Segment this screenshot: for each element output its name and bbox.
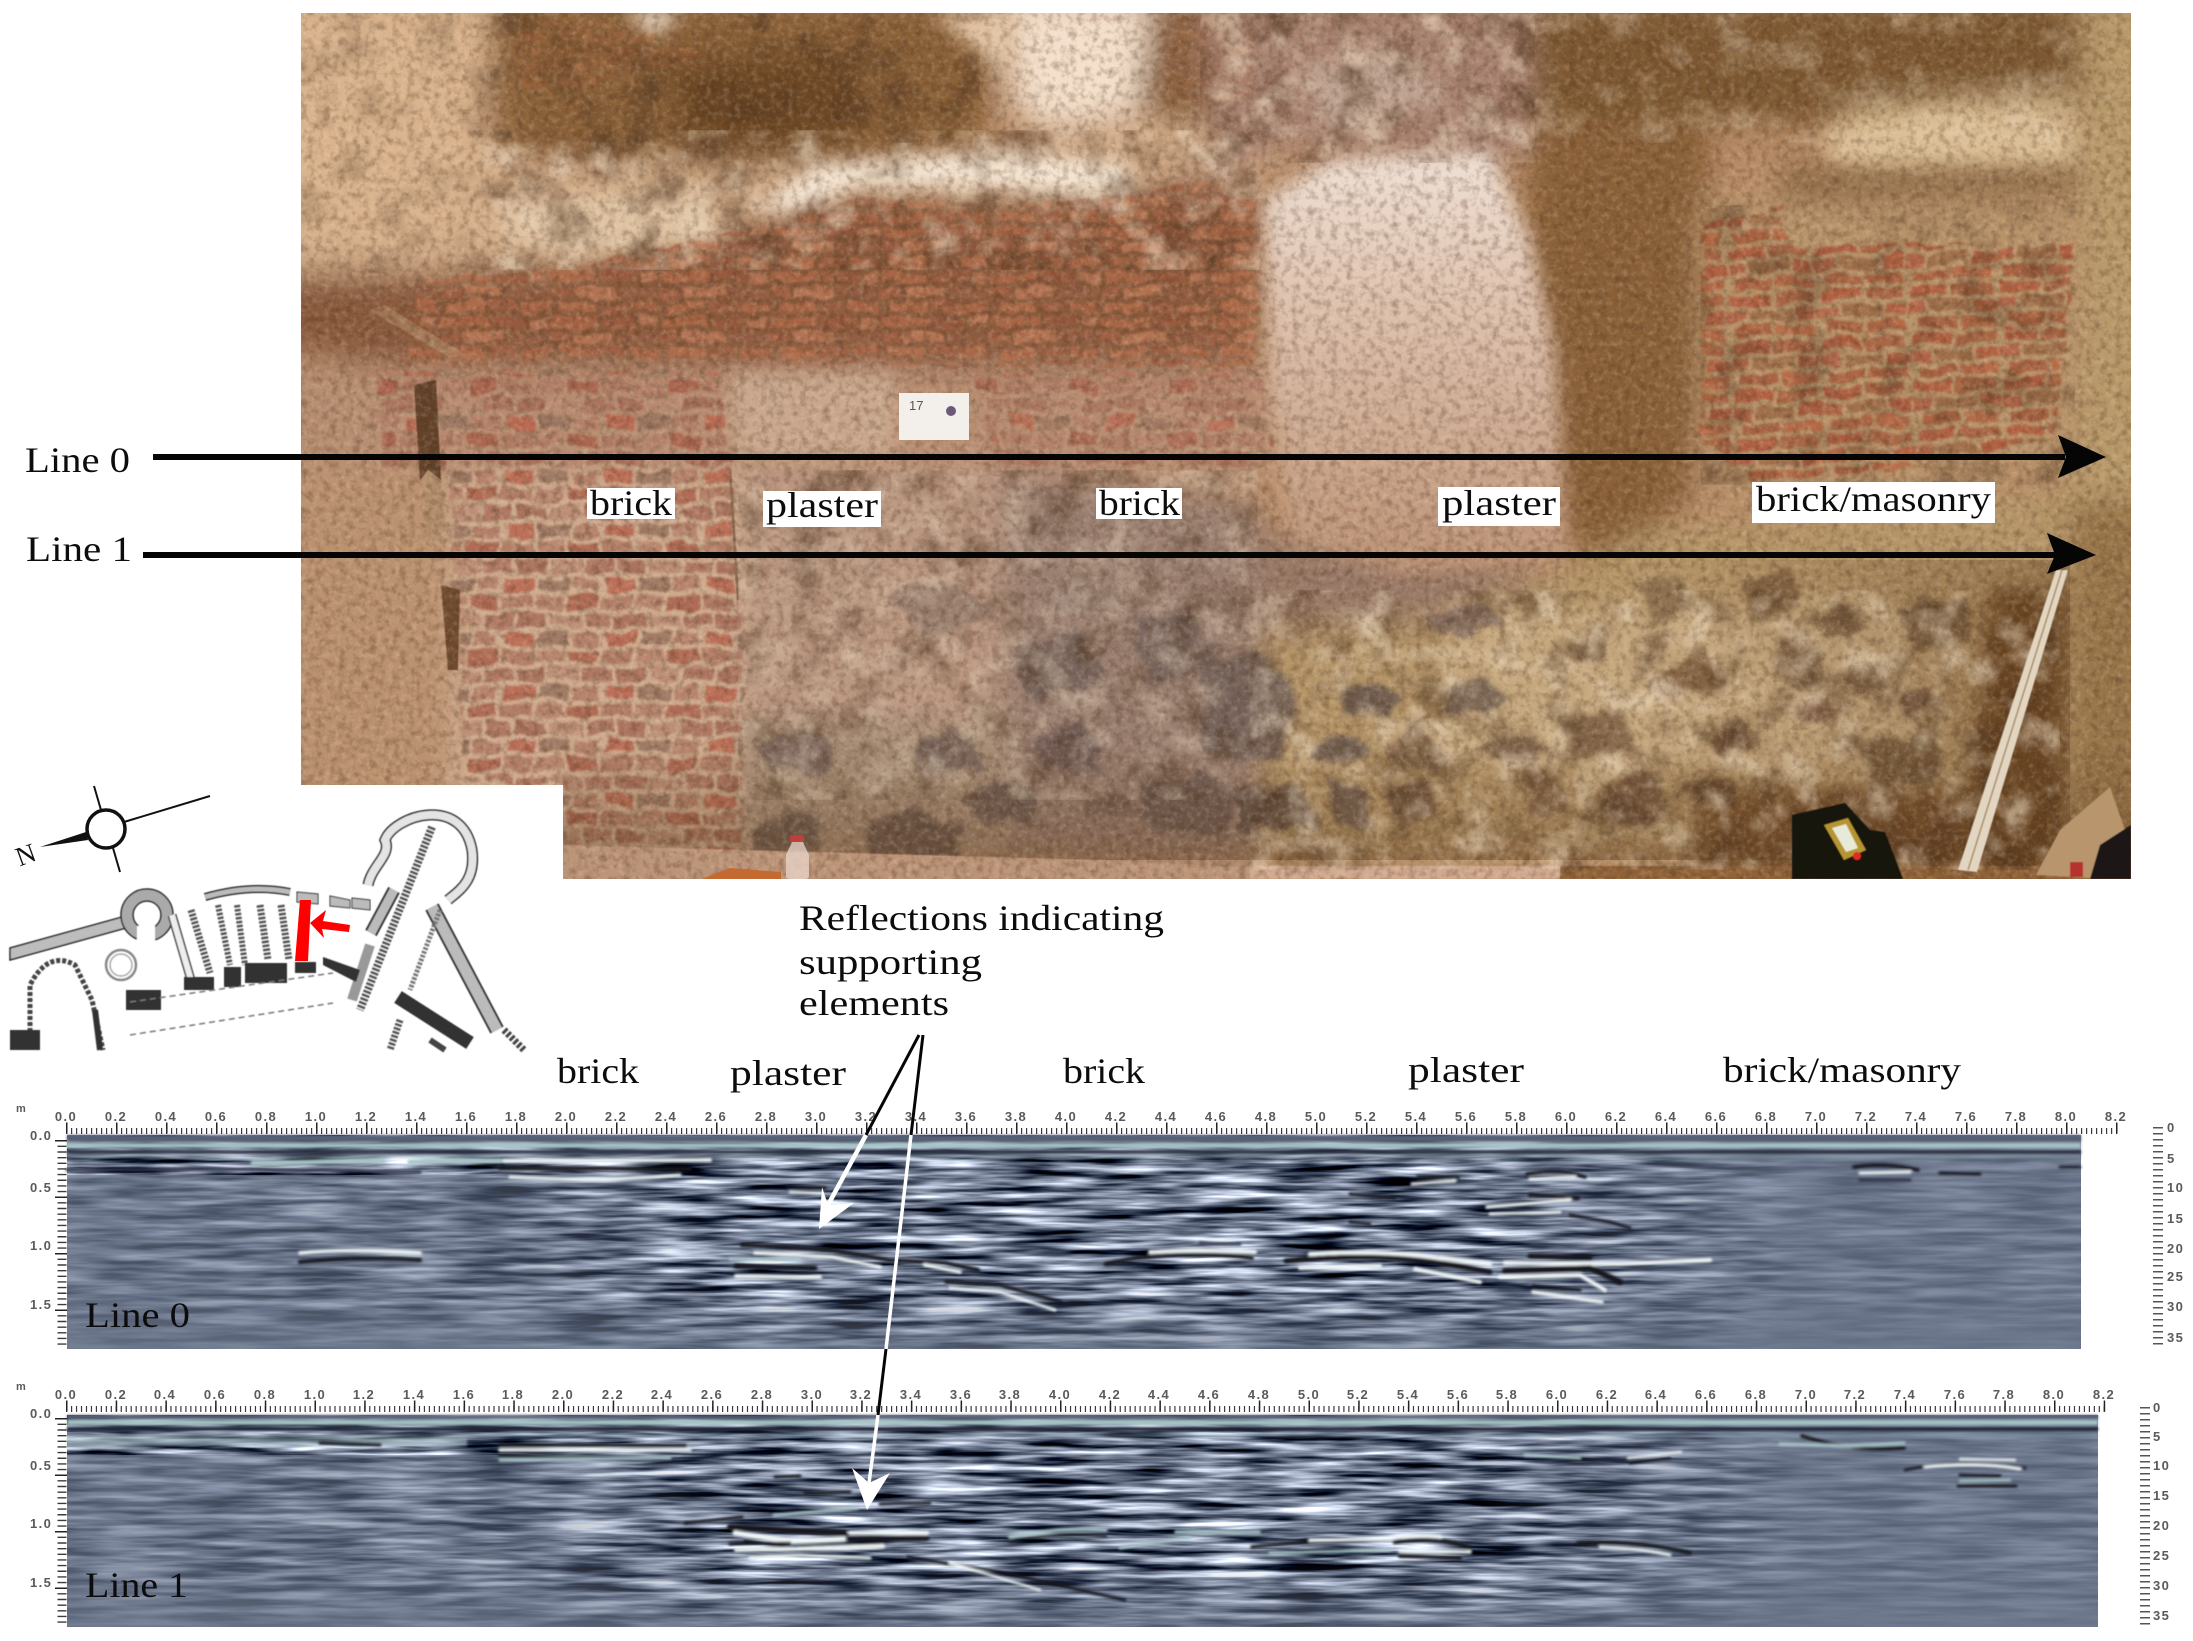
axis: Line 1 distance ruler: 1.4 <box>403 1387 425 1402</box>
axis: Line 0 distance ruler: 1.0 <box>305 1109 327 1124</box>
brick courses, upper band <box>400 20 1257 368</box>
axis: Line 0 right scale: 20 <box>2167 1241 2184 1256</box>
axis: Line 1 distance ruler: 7.2 <box>1844 1387 1866 1402</box>
axis: Line 0 distance ruler: 7.2 <box>1855 1109 1877 1124</box>
axis: Line 0 distance ruler: 0.4 <box>155 1109 177 1124</box>
callout: reflections indicating supporting elements: supporting <box>799 942 982 982</box>
axis: Line 1 distance ruler: 0.0 <box>55 1387 77 1402</box>
axis: Line 0 distance ruler: 4.0 <box>1055 1109 1077 1124</box>
axis: Line 1 distance ruler: 1.0 <box>304 1387 326 1402</box>
axis: Line 1 distance ruler: 4.4 <box>1148 1387 1170 1402</box>
axis: Line 1 right scale: 15 <box>2153 1488 2170 1503</box>
axis: Line 1 distance ruler: 6.8 <box>1745 1387 1767 1402</box>
callout: reflections indicating supporting elements: Reflections indicating <box>799 898 1164 938</box>
axis: Line 1 right scale: 35 <box>2153 1608 2170 1623</box>
photo label: plaster 2: plaster <box>1442 483 1556 523</box>
axis: Line 0 distance ruler: 0.6 <box>205 1109 227 1124</box>
axis: Line 0 right scale: 25 <box>2167 1269 2184 1284</box>
rubble texture patches <box>301 13 2075 870</box>
axis: Line 1 distance ruler: 0.4 <box>154 1387 176 1402</box>
axis: Line 0 distance ruler: 8.0 <box>2055 1109 2077 1124</box>
chart: radargram Line 1 <box>67 1415 2098 1627</box>
axis: Line 1 distance ruler: 5.4 <box>1397 1387 1419 1402</box>
axis: Line 0 depth scale in metres <box>16 1103 62 1345</box>
axis: Line 0 right scale: 30 <box>2167 1299 2184 1314</box>
radar device <box>1792 803 1903 879</box>
arrow: Line 0 <box>153 435 2106 478</box>
axis: Line 0 distance ruler: 7.8 <box>2005 1109 2027 1124</box>
brick courses, red right panel <box>1700 205 2074 480</box>
axis: Line 0 distance ruler: 6.6 <box>1705 1109 1727 1124</box>
axis: Line 0 distance ruler: 7.4 <box>1905 1109 1927 1124</box>
axis: Line 0 right scale: 10 <box>2167 1180 2184 1195</box>
label: Line 1 inside chart: Line 1 <box>85 1565 188 1605</box>
axis: Line 0 distance ruler: 2.6 <box>705 1109 727 1124</box>
sack and red item at right <box>2036 787 2131 879</box>
photo label: brick: brick <box>590 483 672 523</box>
axis: Line 1 right scale: 10 <box>2153 1458 2170 1473</box>
axis: Line 0 distance ruler: 1.6 <box>455 1109 477 1124</box>
label: Line 0: Line 0 <box>25 440 130 480</box>
axis: Line 1 distance ruler: 0.2 <box>105 1387 127 1402</box>
radargram header: brick: brick <box>557 1051 639 1091</box>
axis: Line 0 distance ruler: 5.0 <box>1305 1109 1327 1124</box>
axis: Line 1 right scale: 25 <box>2153 1548 2170 1563</box>
axis: Line 0 distance ruler: 5.4 <box>1405 1109 1427 1124</box>
axis: Line 1 right scale: 5 <box>2153 1429 2162 1444</box>
site plan with compass <box>10 786 524 1050</box>
axis: Line 1 distance ruler: 7.6 <box>1944 1387 1966 1402</box>
axis: Line 0 depth scale in metres: 0.0 <box>30 1128 52 1143</box>
axis: Line 1 distance ruler: 5.6 <box>1447 1387 1469 1402</box>
axis: Line 1 distance ruler: 1.8 <box>502 1387 524 1402</box>
axis: Line 1 distance ruler: 0.8 <box>254 1387 276 1402</box>
axis: Line 0 distance ruler: 0.2 <box>105 1109 127 1124</box>
axis: Line 0 distance ruler: 6.0 <box>1555 1109 1577 1124</box>
axis: Line 1 distance ruler: 5.0 <box>1298 1387 1320 1402</box>
axis: Line 1 distance ruler: 6.4 <box>1645 1387 1667 1402</box>
icon: compass: N <box>11 837 40 872</box>
axis: Line 0 distance ruler: 3.4 <box>905 1109 927 1124</box>
axis: Line 1 distance ruler: 3.8 <box>999 1387 1021 1402</box>
photo label: plaster: plaster <box>766 485 878 525</box>
photo label: brick/masonry: brick/masonry <box>1756 479 1991 519</box>
orange object on the floor <box>702 868 781 879</box>
axis: Line 0 distance ruler: 6.8 <box>1755 1109 1777 1124</box>
axis: Line 0 depth scale in metres: 0.5 <box>30 1180 52 1195</box>
axis: Line 1 distance ruler: 2.8 <box>751 1387 773 1402</box>
axis: Line 1 distance ruler: 4.6 <box>1198 1387 1220 1402</box>
axis: Line 0 distance ruler: 3.2 <box>855 1109 877 1124</box>
axis: Line 0 distance ruler: 2.8 <box>755 1109 777 1124</box>
axis: Line 0 depth scale in metres: 1.0 <box>30 1238 52 1253</box>
axis: Line 0 distance ruler: 5.2 <box>1355 1109 1377 1124</box>
bottle <box>786 835 809 879</box>
axis: Line 1 distance ruler: 3.2 <box>850 1387 872 1402</box>
shadow gradients <box>563 560 2131 880</box>
panel: wall photograph <box>270 0 2150 890</box>
axis: Line 1 distance ruler: 6.2 <box>1596 1387 1618 1402</box>
axis: Line 0 distance ruler: 2.4 <box>655 1109 677 1124</box>
axis: Line 0 distance ruler: 1.4 <box>405 1109 427 1124</box>
red arrow <box>310 910 350 938</box>
axis: Line 0 distance ruler: 2.0 <box>555 1109 577 1124</box>
strong reflectors <box>320 1436 2025 1600</box>
axis: Line 1 distance ruler: 1.6 <box>453 1387 475 1402</box>
axis: Line 1 distance ruler: 4.8 <box>1248 1387 1270 1402</box>
axis: Line 0 distance ruler: 8.2 <box>2105 1109 2127 1124</box>
axis: Line 0 distance ruler: 7.6 <box>1955 1109 1977 1124</box>
axis: Line 0 distance ruler: 3.0 <box>805 1109 827 1124</box>
axis: Line 0 distance ruler: 6.2 <box>1605 1109 1627 1124</box>
axis: Line 1 distance ruler: 2.6 <box>701 1387 723 1402</box>
floor plan of the building <box>10 815 524 1050</box>
axis: Line 0 distance ruler: 4.6 <box>1205 1109 1227 1124</box>
radargram header: plaster 2: plaster <box>1408 1050 1524 1090</box>
axis: Line 0 right scale: 35 <box>2167 1330 2184 1345</box>
axis: Line 1 depth scale in metres: 1.0 <box>30 1516 52 1531</box>
survey card "17" <box>899 393 969 440</box>
arrow: callout to Line 0 reflection <box>819 1035 919 1229</box>
photo label: brick 2: brick <box>1099 483 1180 523</box>
axis: Line 1 depth scale in metres: 0.5 <box>30 1458 52 1473</box>
arrow: Line 1 <box>143 533 2096 574</box>
radargram header: brick/masonry: brick/masonry <box>1723 1050 1961 1090</box>
leaning stick <box>1958 570 2068 872</box>
surface bands <box>67 1415 2098 1446</box>
axis: Line 0 distance ruler: 1.8 <box>505 1109 527 1124</box>
strong reflectors <box>67 1160 2080 1310</box>
axis: Line 1 distance ruler: 3.4 <box>900 1387 922 1402</box>
axis: Line 1 right scale: 0 <box>2153 1400 2162 1415</box>
red survey line marker <box>295 900 311 961</box>
axis: Line 1 distance ruler: 3.0 <box>801 1387 823 1402</box>
axis: Line 1 distance ruler: 1.2 <box>353 1387 375 1402</box>
axis: Line 0 distance ruler: 4.2 <box>1105 1109 1127 1124</box>
brick courses, lower panel <box>380 372 1275 880</box>
callout: reflections indicating supporting elements: elements <box>799 983 949 1023</box>
axis: Line 0 depth scale in metres: m <box>16 1103 27 1115</box>
axis: Line 1 right scale <box>2145 1400 2170 1625</box>
axis: Line 0 distance ruler: 0.8 <box>255 1109 277 1124</box>
axis: Line 0 distance ruler: 4.8 <box>1255 1109 1277 1124</box>
axis: Line 1 depth scale in metres: 1.5 <box>30 1575 52 1590</box>
axis: Line 0 distance ruler: 3.8 <box>1005 1109 1027 1124</box>
axis: Line 0 distance ruler: 1.2 <box>355 1109 377 1124</box>
axis: Line 0 right scale: 15 <box>2167 1211 2184 1226</box>
axis: Line 1 distance ruler: 5.8 <box>1496 1387 1518 1402</box>
axis: Line 1 distance ruler: 4.2 <box>1099 1387 1121 1402</box>
axis: Line 0 distance ruler: 3.6 <box>955 1109 977 1124</box>
floor <box>563 845 2131 879</box>
axis: Line 1 right scale: 20 <box>2153 1518 2170 1533</box>
survey card "17": 17 <box>909 398 923 413</box>
axis: Line 1 distance ruler: 7.4 <box>1894 1387 1916 1402</box>
axis: Line 1 distance ruler: 2.0 <box>552 1387 574 1402</box>
axis: Line 0 distance ruler: 7.0 <box>1805 1109 1827 1124</box>
axis: Line 1 distance ruler: 3.6 <box>950 1387 972 1402</box>
axis: Line 0 depth scale in metres: 1.5 <box>30 1297 52 1312</box>
axis: Line 1 distance ruler: 2.2 <box>602 1387 624 1402</box>
axis: Line 1 distance ruler: 5.2 <box>1347 1387 1369 1402</box>
mottled texture <box>301 13 2131 879</box>
label: Line 1: Line 1 <box>26 529 132 569</box>
axis: Line 0 distance ruler: 6.4 <box>1655 1109 1677 1124</box>
axis: Line 1 distance ruler: 6.6 <box>1695 1387 1717 1402</box>
chart: radargram Line 0 <box>67 1135 2081 1349</box>
axis: Line 0 distance ruler <box>55 1109 2127 1131</box>
icon: compass <box>11 786 210 872</box>
axis: Line 1 distance ruler: 2.4 <box>651 1387 673 1402</box>
axis: Line 0 right scale: 0 <box>2167 1120 2176 1135</box>
axis: Line 1 distance ruler: 4.0 <box>1049 1387 1071 1402</box>
axis: Line 1 distance ruler <box>55 1387 2115 1409</box>
radargram header: brick 2: brick <box>1063 1051 1145 1091</box>
arrow: callout to Line 1 reflection <box>852 1035 923 1510</box>
axis: Line 1 distance ruler: 6.0 <box>1546 1387 1568 1402</box>
rubble stones <box>750 570 1975 857</box>
axis: Line 1 right scale: 30 <box>2153 1578 2170 1593</box>
axis: Line 1 depth scale in metres: m <box>16 1381 27 1393</box>
axis: Line 0 distance ruler: 5.6 <box>1455 1109 1477 1124</box>
axis: Line 1 depth scale in metres <box>16 1381 62 1625</box>
axis: Line 1 distance ruler: 7.0 <box>1795 1387 1817 1402</box>
radargram header: plaster: plaster <box>730 1053 846 1093</box>
axis: Line 0 right scale: 5 <box>2167 1151 2176 1166</box>
axis: Line 0 distance ruler: 0.0 <box>55 1109 77 1124</box>
axis: Line 1 distance ruler: 8.2 <box>2093 1387 2115 1402</box>
axis: Line 0 distance ruler: 4.4 <box>1155 1109 1177 1124</box>
axis: Line 0 distance ruler: 2.2 <box>605 1109 627 1124</box>
axis: Line 1 distance ruler: 7.8 <box>1993 1387 2015 1402</box>
axis: Line 0 right scale <box>2158 1120 2184 1345</box>
axis: Line 1 depth scale in metres: 0.0 <box>30 1406 52 1421</box>
axis: Line 1 distance ruler: 8.0 <box>2043 1387 2065 1402</box>
axis: Line 1 distance ruler: 0.6 <box>204 1387 226 1402</box>
callout: reflections indicating supporting elements <box>799 898 1164 1023</box>
label: Line 0 inside chart: Line 0 <box>85 1295 190 1335</box>
axis: Line 0 distance ruler: 5.8 <box>1505 1109 1527 1124</box>
crack and seam <box>369 305 738 670</box>
surface bands <box>67 1135 2081 1158</box>
